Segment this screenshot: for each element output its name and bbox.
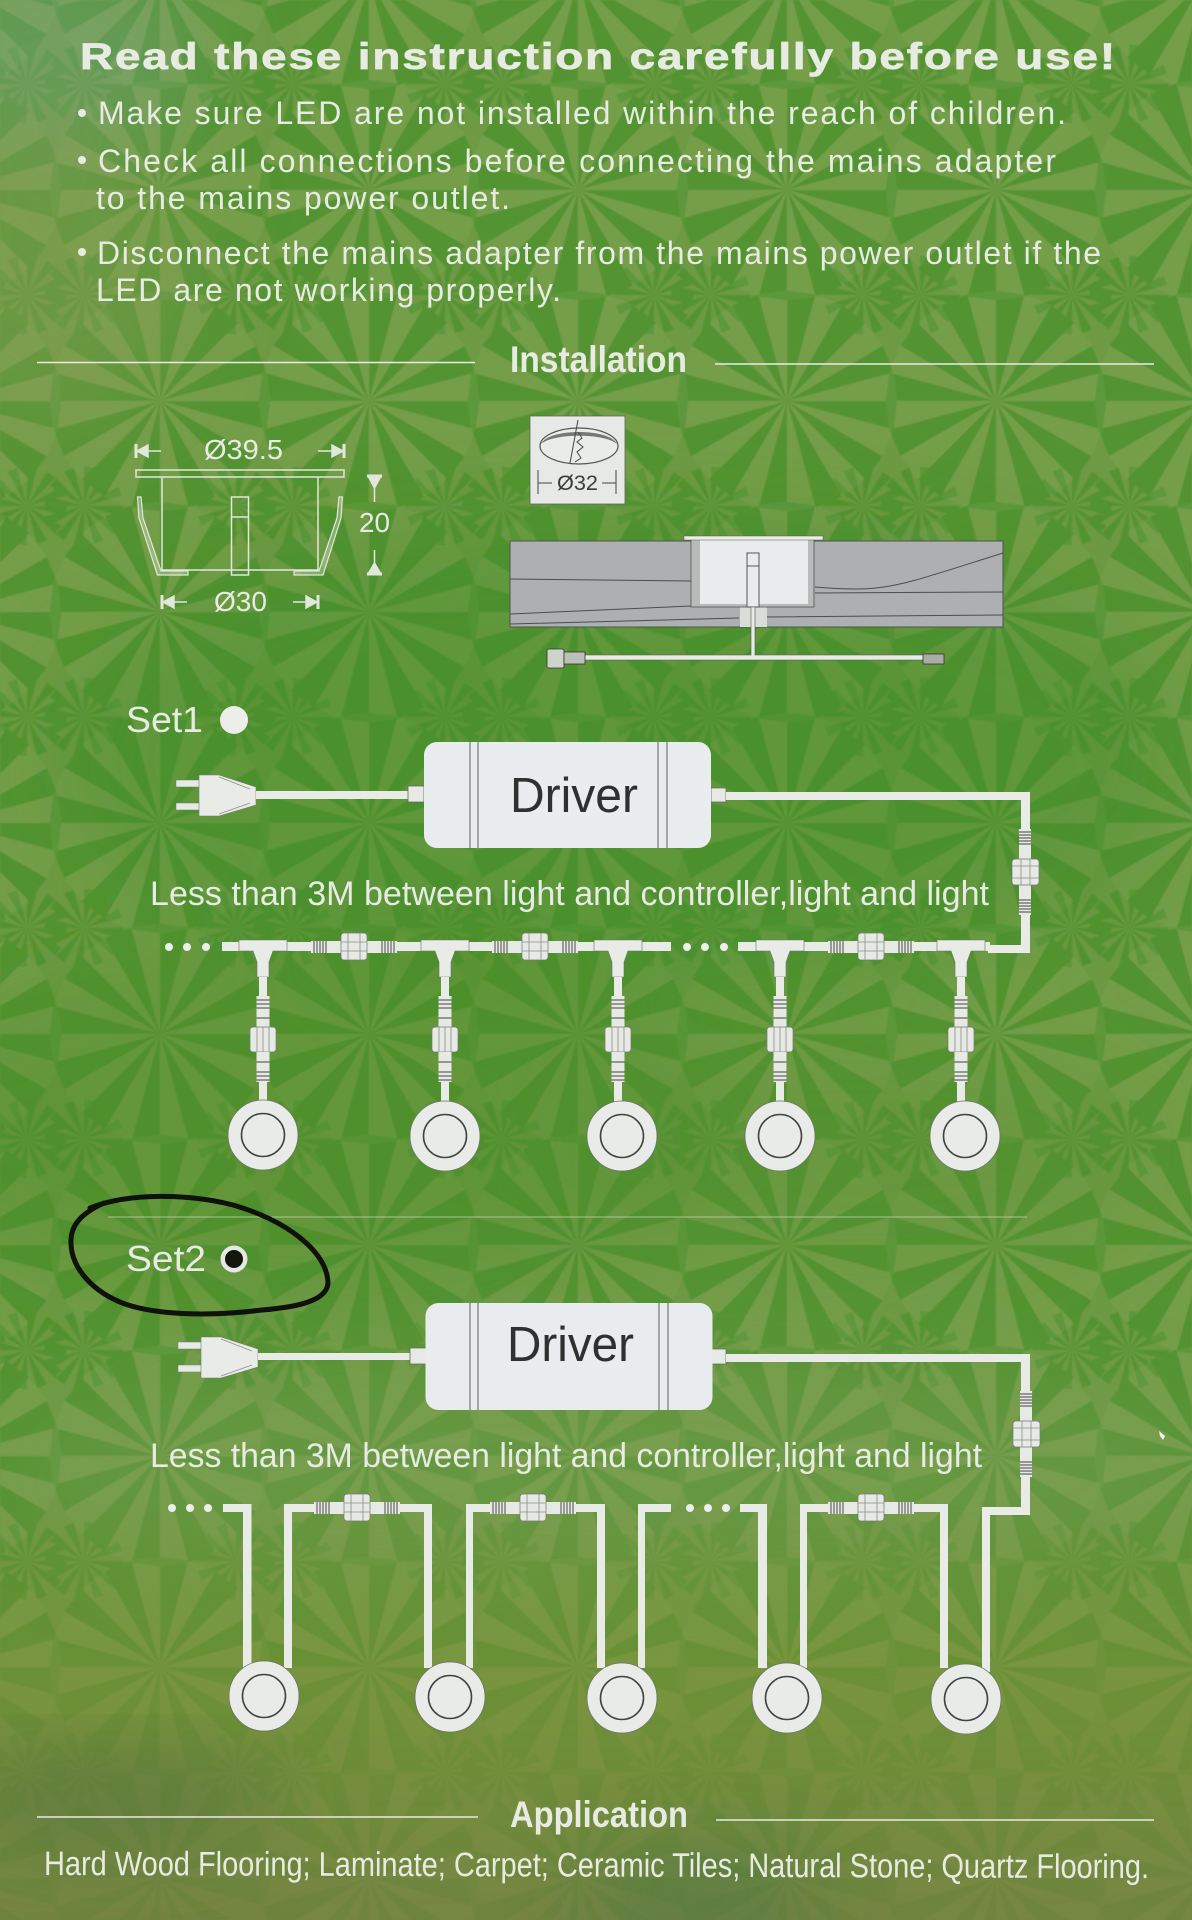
continuation dots — [172, 1504, 726, 1512]
inline connector 1 — [314, 1494, 400, 1521]
width arrows 30 — [162, 595, 318, 609]
dimension labels: Ø30 — [214, 586, 267, 617]
light 3 — [587, 1101, 657, 1171]
output cable — [726, 1354, 1030, 1672]
bullet: check connections: Check all connections before connecting the mains adapter — [98, 143, 1056, 179]
divider between sets — [108, 1216, 1027, 1218]
icon: drill hole diameter 32: Ø32 — [557, 472, 598, 495]
icon: drill hole diameter 32 — [530, 416, 625, 504]
wiring note: Less than 3M between light and controller,light and light — [150, 875, 990, 913]
driver box: Driver — [507, 1318, 634, 1372]
bullet: disconnect adapter: Disconnect the mains adapter from the mains power outlet if the — [97, 235, 1101, 271]
cable with connectors — [547, 607, 944, 668]
Installation section heading: Installation — [510, 339, 687, 380]
scan speck — [1159, 1431, 1165, 1440]
Set1 label — [126, 699, 248, 740]
light 3 — [587, 1663, 657, 1733]
bus wires — [222, 942, 990, 951]
dimension labels: 20 — [359, 507, 390, 538]
bullet: disconnect adapter: LED are not working properly. — [96, 272, 561, 308]
wood floor — [510, 541, 1003, 627]
light 2 — [415, 1662, 485, 1732]
bullet: disconnect adapter — [78, 235, 1101, 308]
diagram: Set2 wiring — [150, 1303, 1040, 1734]
T connector and drop 1 — [239, 940, 287, 1102]
width arrows 39.5 — [136, 444, 344, 458]
output cable — [726, 792, 1030, 953]
continuation dots — [169, 943, 724, 951]
height arrows 20 — [367, 476, 382, 574]
spring clips — [138, 497, 342, 575]
driver box: Driver — [510, 769, 638, 823]
title: Read these instruction carefully before use! — [80, 36, 1117, 77]
Application section heading: Application — [510, 1794, 688, 1835]
inline connector 3 — [828, 1494, 914, 1521]
inline connector 2 — [492, 933, 578, 960]
fixture in hole — [684, 536, 823, 627]
T connector and drop 4 — [756, 940, 804, 1102]
driver box — [408, 742, 726, 848]
mains cable — [256, 791, 410, 799]
housing body — [162, 477, 318, 570]
diagram: Set1 wiring — [150, 742, 1039, 1171]
dimension drawing of the light — [136, 444, 382, 609]
light 1 — [228, 1100, 298, 1170]
top plate — [136, 470, 344, 477]
looped wires between lights — [223, 1504, 948, 1668]
vertical connector — [1012, 829, 1039, 915]
bullet: check connections: to the mains power outlet. — [96, 180, 510, 216]
light 4 — [745, 1101, 815, 1171]
dimension labels — [204, 434, 390, 617]
light 2 — [410, 1101, 480, 1171]
inline connector 2 — [490, 1494, 576, 1521]
plug — [176, 775, 256, 816]
light 5 — [930, 1101, 1000, 1171]
driver box — [410, 1303, 726, 1410]
inline connector 1 — [311, 933, 397, 960]
safety instructions list — [78, 95, 1101, 308]
T connector and drop 5 — [937, 940, 985, 1102]
Set2 label with hand-drawn circle — [71, 1196, 328, 1314]
vertical connector — [1013, 1391, 1040, 1477]
light 1 — [229, 1661, 299, 1731]
mains cable — [258, 1353, 412, 1360]
T connector and drop 3 — [594, 940, 642, 1102]
Set2 label with hand-drawn circle: Set2 — [126, 1238, 206, 1279]
inline connector 3 — [828, 933, 914, 960]
bullet: check connections — [78, 143, 1056, 216]
Set1 label: Set1 — [126, 699, 203, 740]
plug — [178, 1337, 258, 1378]
installed light cross-section in floor — [510, 536, 1003, 668]
light 5 — [931, 1664, 1001, 1734]
dimension labels: Ø39.5 — [204, 434, 283, 465]
centre post — [232, 497, 248, 575]
Application section heading — [37, 1794, 1154, 1835]
bullet: children: Make sure LED are not installed within the reach of children. — [98, 95, 1066, 131]
T connector and drop 2 — [421, 940, 469, 1102]
light 4 — [752, 1663, 822, 1733]
wiring note: Less than 3M between light and controller,light and light — [150, 1437, 983, 1475]
